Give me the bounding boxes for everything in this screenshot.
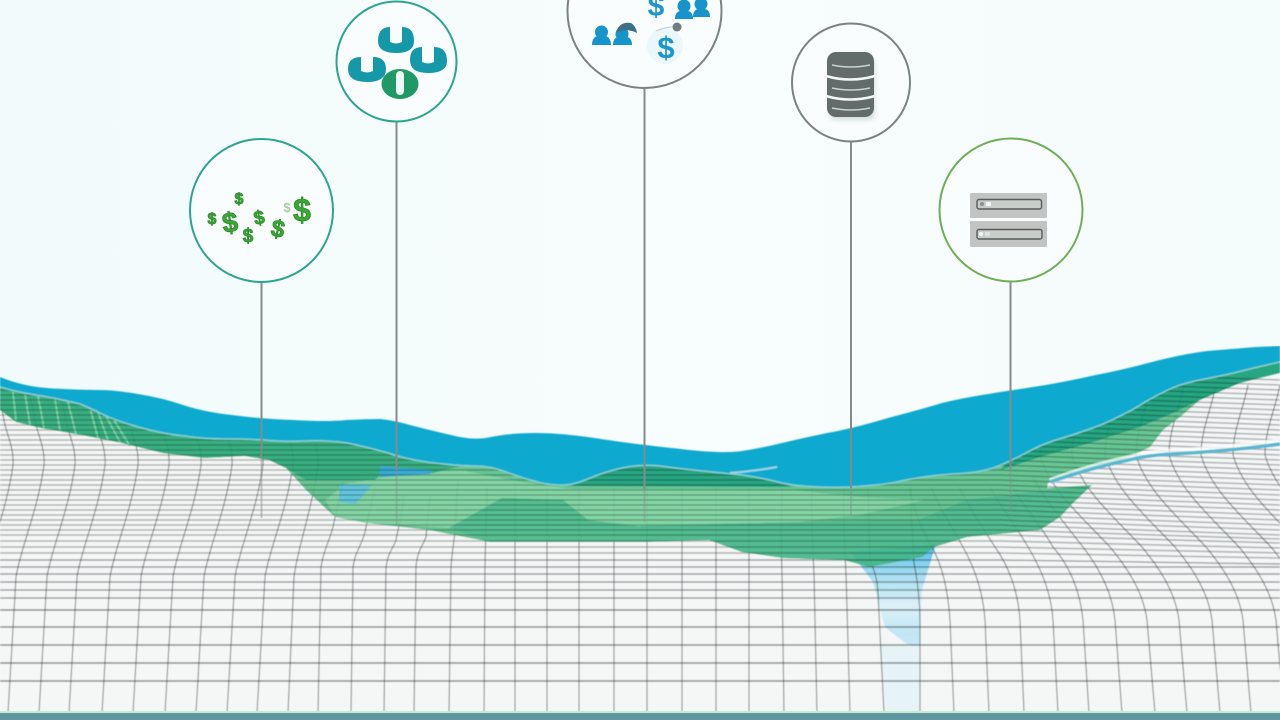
marker 5: server: [940, 138, 1082, 282]
icon: server unit top: [970, 193, 1047, 218]
glow behind lower dollar: [647, 28, 683, 64]
icon: database stack: [826, 52, 875, 120]
wireframe grid: vertical lines: [0, 385, 1280, 713]
icon: top token: [378, 27, 414, 53]
connector 1: [260, 283, 262, 518]
shoreline highlight: [0, 362, 1280, 487]
terrain: layered landscape: [0, 346, 1280, 720]
icon: dollar signs: $: [220, 206, 240, 239]
light stripes on the left band: [13, 392, 130, 446]
icon: dollar signs: [208, 191, 311, 247]
dark green right band: [1000, 362, 1280, 470]
icon: person with dark hat: [613, 23, 637, 45]
connector 2: [396, 122, 398, 525]
icon: small gray detail: [656, 22, 682, 32]
dark green central ridge: [571, 464, 793, 487]
wireframe grid: horizontal lines: [0, 370, 1280, 681]
icon: dollar signs: $: [252, 207, 267, 230]
ground surface: [0, 362, 1280, 720]
icon: dollar signs: $: [208, 211, 217, 228]
icon: right token: [410, 47, 447, 73]
icon: person top right 1: [675, 0, 693, 19]
light green meadow: [325, 470, 925, 528]
green basin: [0, 362, 1280, 567]
icon: person top right 2: [693, 0, 710, 17]
icon: dollar signs: $: [243, 226, 254, 247]
marker 2: group of rounded tokens: [336, 2, 456, 122]
icon: dollar signs: $: [283, 200, 291, 215]
marker 3: people and money: [568, 0, 722, 88]
blue pools in the basin: [339, 466, 433, 504]
darker green lower band: [640, 485, 1092, 567]
icon: dollar signs: $: [235, 191, 244, 208]
icon: server unit bottom: [970, 221, 1047, 247]
small light streak in the water: [730, 467, 777, 473]
icon: dollar signs: $: [293, 192, 311, 228]
side stream on the right: [1050, 441, 1280, 482]
green base layer: [0, 362, 1280, 567]
icon: person left: [592, 26, 611, 45]
icon: left token: [348, 57, 386, 82]
connector 5: [1010, 282, 1012, 512]
base strip: [0, 711, 1280, 720]
dark green left band: [0, 387, 461, 480]
darker green hill: [449, 498, 640, 542]
marker 4: database: [792, 24, 910, 142]
marker 1: money: [190, 139, 333, 282]
icon: lower dollar: $: [657, 30, 675, 65]
blue water band: [0, 346, 1280, 487]
icon: dollar signs: $: [269, 215, 288, 244]
connector 4: [850, 142, 852, 516]
icon: green token: [382, 69, 418, 99]
connector 3: [644, 88, 646, 522]
waterfall seeping down: [850, 544, 936, 713]
